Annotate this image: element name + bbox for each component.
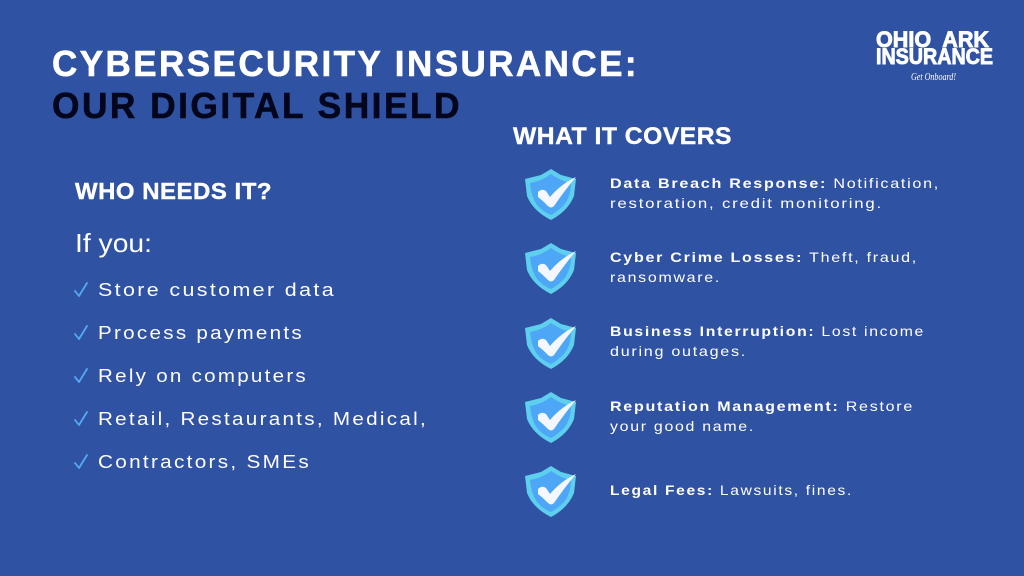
icon: shield check 1 [525, 169, 576, 220]
text: cyber crime losses [610, 249, 918, 285]
list item: contractors, SMEs: Contractors, SMEs [98, 452, 311, 472]
icon: shield check 2 [525, 243, 576, 294]
heading: who needs it: WHO NEEDS IT? [75, 178, 272, 204]
text: business interruption: during outages. [610, 343, 747, 359]
logo: Ohio Ark Insurance [876, 27, 993, 83]
list item: retail, restaurants, medical: Retail, Restaurants, Medical, [98, 409, 428, 429]
logo: Ohio Ark Insurance: OHIO ARK [876, 27, 989, 52]
logo: Ohio Ark Insurance: INSURANCE [876, 44, 993, 69]
title: OUR DIGITAL SHIELD [52, 85, 462, 126]
panel: who needs it [75, 178, 428, 472]
text: data breach response [610, 175, 940, 211]
list item: process payments: Process payments [98, 323, 304, 343]
list item: store customer data: Store customer data [98, 280, 336, 300]
text: data breach response: restoration, credit monitoring. [610, 195, 883, 211]
text: business interruption [610, 323, 925, 359]
panel: what it covers [513, 123, 940, 517]
heading: what it covers: WHAT IT COVERS [513, 123, 732, 150]
text: cyber crime losses: Cyber Crime Losses: Theft, fraud, [610, 249, 918, 265]
text: data breach response: Data Breach Response: Notification, [610, 175, 940, 191]
logo: Ohio Ark Insurance: Get Onboard! [911, 71, 956, 83]
text: cyber crime losses: ransomware. [610, 269, 721, 285]
icon: shield check 3 [525, 318, 576, 369]
title [52, 43, 639, 126]
text: reputation management: Reputation Management: Restore [610, 398, 914, 414]
text: business interruption: Business Interruption: Lost income [610, 323, 925, 339]
text: legal fees: Legal Fees: Lawsuits, fines. [610, 482, 853, 498]
text: reputation management: your good name. [610, 418, 755, 434]
list item: rely on computers: Rely on computers [98, 366, 308, 386]
icon: shield check 4 [525, 392, 576, 443]
icon: shield check 5 [525, 466, 576, 517]
text: reputation management [610, 398, 914, 434]
list: who needs it [75, 280, 428, 472]
text: if you: If you: [75, 228, 152, 258]
title: CYBERSECURITY INSURANCE: [52, 43, 639, 84]
